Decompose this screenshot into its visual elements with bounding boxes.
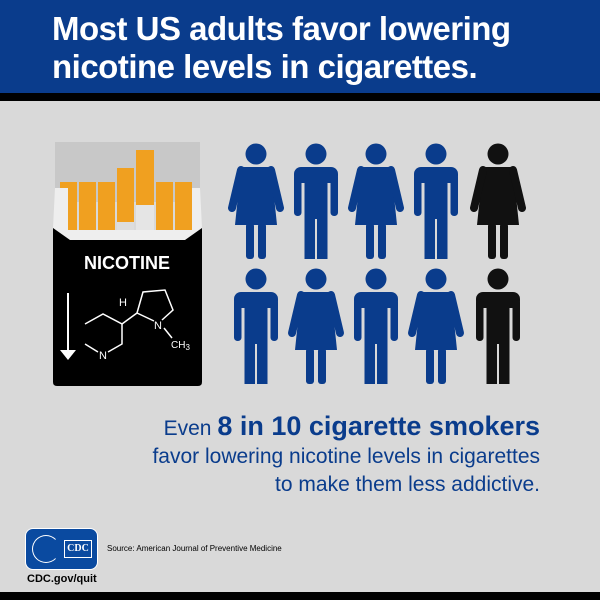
- title: [52, 10, 511, 85]
- illustration: cigarette pack: N: [154, 320, 162, 332]
- CDC logo: CDC: [67, 543, 89, 554]
- icon: down arrow: [60, 293, 76, 360]
- CDC logo: [25, 528, 98, 570]
- illustration: cigarette pack: 3: [185, 343, 190, 352]
- illustration: cigarette pack: H: [119, 297, 127, 309]
- url: CDC.gov/quit: [27, 573, 97, 585]
- statistic text: [152, 411, 540, 496]
- illustration: cigarette pack: [53, 142, 202, 386]
- source: Source: American Journal of Preventive Medicine: [107, 544, 282, 553]
- illustration: cigarette pack: N: [99, 350, 107, 362]
- statistic text: favor lowering nicotine levels in cigarettes: [152, 445, 540, 468]
- pack label: NICOTINE: [84, 253, 170, 273]
- title: nicotine levels in cigarettes.: [52, 48, 477, 85]
- statistic text: Even 8 in 10 cigarette smokers: [164, 411, 540, 441]
- nicotine molecule: [85, 290, 173, 352]
- title: Most US adults favor lowering: [52, 10, 511, 47]
- header banner: [0, 0, 600, 93]
- statistic text: to make them less addictive.: [275, 473, 540, 496]
- illustration: cigarette pack: CH: [171, 340, 185, 351]
